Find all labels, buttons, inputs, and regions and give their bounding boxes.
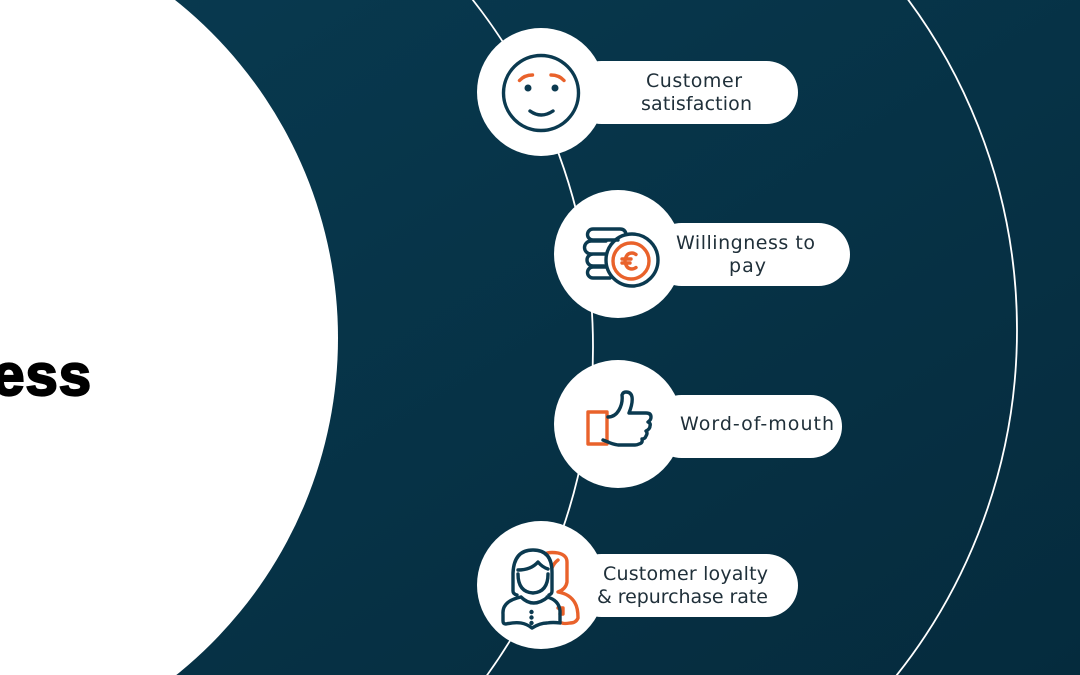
item: word of mouth	[554, 360, 842, 488]
label	[597, 563, 768, 608]
label	[676, 232, 815, 277]
label: Customer loyalty	[603, 563, 768, 585]
badge and pill	[477, 28, 798, 156]
icon: customers	[503, 550, 578, 628]
item: willingness to pay	[554, 190, 850, 318]
badge and pill	[477, 521, 798, 649]
label: & repurchase rate	[597, 586, 768, 608]
icon: thumbs up	[588, 392, 651, 445]
label	[641, 70, 752, 115]
item: customer satisfaction	[477, 28, 798, 156]
inner ring	[0, 0, 593, 675]
badge and pill	[554, 360, 842, 488]
badge and pill	[554, 190, 850, 318]
label: Word-of-mouth	[680, 413, 834, 435]
item: customer loyalty	[477, 521, 798, 649]
label: Willingness to	[676, 232, 815, 254]
icon: smiley face	[504, 56, 578, 130]
icon: euro coins	[584, 229, 658, 286]
label: satisfaction	[641, 93, 752, 115]
label: Customer	[646, 70, 742, 92]
label: pay	[729, 255, 766, 277]
